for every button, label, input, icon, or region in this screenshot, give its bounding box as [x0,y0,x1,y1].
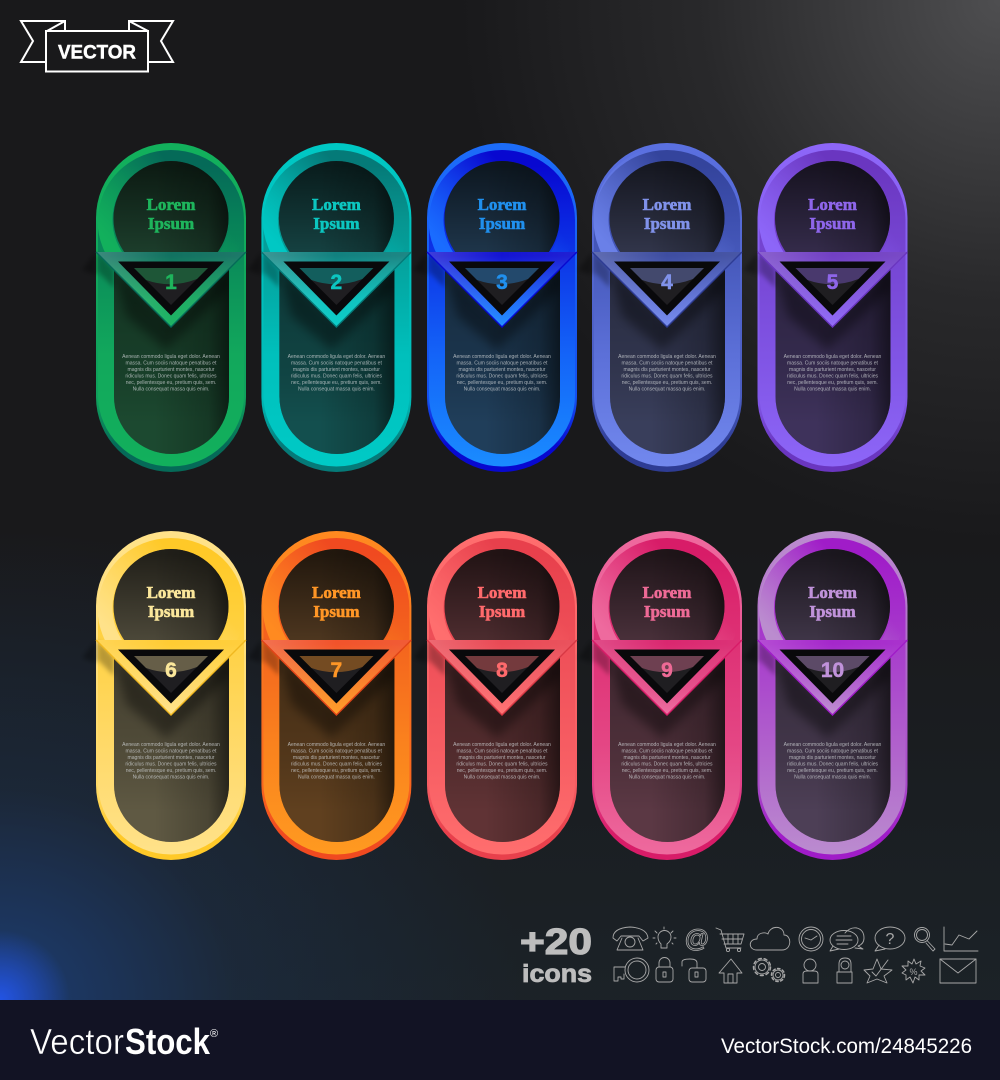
card 6: yellow: Ipsum [148,602,194,621]
card 4: periwinkle [578,143,742,472]
card 3: blue [413,143,577,472]
logo: VectorStock: Stock [125,1021,211,1062]
banner: vector ribbon [21,21,173,72]
card 4: periwinkle: ridiculus mus. Donec quam felis, ultricies [621,374,713,380]
card 4: periwinkle: 4 [661,271,673,294]
card 10: violet: 10 [821,659,844,682]
card 7: orange: magnis dis parturient montes, nascetur [293,755,380,761]
heading: +20 icons: icons [522,960,592,988]
icon: question bubble [875,927,905,951]
card 2: teal: nec, pellentesque eu, pretium quis, sem. [291,380,382,386]
card 8: coral [413,531,577,860]
card 2: teal: Aenean commodo ligula eget dolor. Aenean [288,354,385,360]
card 8: coral: nec, pellentesque eu, pretium quis, sem. [457,768,547,774]
icon set [613,925,978,983]
card 7: orange: Ipsum [313,602,360,621]
card 8: coral: massa. Cum sociis natoque penatibus et [457,748,548,754]
card 1: green: Aenean commodo ligula eget dolor. Aenean [122,354,220,360]
card 2: teal [247,143,411,472]
card 1: green: Nulla consequat massa quis enim. [133,386,209,392]
card 3: blue: ridiculus mus. Donec quam felis, ultricies [456,374,548,380]
card 9: pink: nec, pellentesque eu, pretium quis, sem. [622,768,712,774]
icon: magnifier [914,928,935,951]
card 9: pink: Ipsum [644,602,690,621]
icon: envelope [940,959,976,983]
card 2: teal: 2 [331,271,342,294]
card 2: teal: magnis dis parturient montes, nascetur [293,367,380,373]
card 1: green: Lorem [147,195,195,214]
footer id text: VectorStock.com/24845226 [721,1035,972,1058]
card 5: purple: Lorem [808,195,857,214]
card 9: pink: Lorem [643,583,691,602]
card 6: yellow: massa. Cum sociis natoque penatibus et [126,748,217,754]
card 2: teal: massa. Cum sociis natoque penatibus et [291,360,382,366]
card 2: teal: Lorem [312,195,361,214]
card 4: periwinkle: Aenean commodo ligula eget dolor. Aenean [618,354,716,360]
icon: lock [656,958,673,982]
card 7: orange [247,531,411,860]
icon: telephone [613,927,648,950]
card 4: periwinkle: Lorem [643,195,691,214]
card 6: yellow: ridiculus mus. Donec quam felis, ultricies [125,762,217,768]
card 1: green: nec, pellentesque eu, pretium quis, sem. [126,380,216,386]
icon: open lock [682,959,706,982]
card 8: coral: ridiculus mus. Donec quam felis, ultricies [456,762,548,768]
card 6: yellow: nec, pellentesque eu, pretium quis, sem. [126,768,216,774]
card 3: blue: 3 [496,271,508,294]
card 6: yellow: Lorem [147,583,195,602]
card 4: periwinkle: Nulla consequat massa quis enim. [629,386,705,392]
card 3: blue: Lorem [478,195,526,214]
icon: line chart [944,927,978,951]
card 7: orange: nec, pellentesque eu, pretium quis, sem. [291,768,382,774]
icon: key [614,958,649,982]
card 3: blue: massa. Cum sociis natoque penatibus et [457,360,548,366]
card 5: purple: 5 [827,271,839,294]
icon: at sign: @ [684,925,710,953]
card 9: pink: Nulla consequat massa quis enim. [629,774,705,780]
card 8: coral: Lorem [478,583,526,602]
card 9: pink [578,531,742,860]
icon: cloud [750,927,790,950]
heading: +20 icons: +20 [520,921,592,962]
card 8: coral: 8 [496,659,508,682]
card 10: violet: Lorem [808,583,857,602]
card 5: purple: Aenean commodo ligula eget dolor. Aenean [784,354,882,360]
card 4: periwinkle: Ipsum [644,214,690,233]
icon: light bulb [653,927,676,948]
card 8: coral: Nulla consequat massa quis enim. [464,774,540,780]
logo: VectorStock: ® [210,1028,218,1040]
icon: woman [837,958,852,983]
card 3: blue: Nulla consequat massa quis enim. [464,386,540,392]
icon: house [719,959,742,983]
icon: question mark: ? [886,931,895,948]
banner: vector ribbon: VECTOR [58,42,136,64]
card 6: yellow: 6 [165,659,177,682]
logo: VectorStock [30,1021,218,1062]
card 7: orange: Lorem [312,583,361,602]
card 6: yellow: Aenean commodo ligula eget dolor. Aenean [122,742,220,748]
card 10: violet: Nulla consequat massa quis enim. [794,774,871,780]
card 5: purple: ridiculus mus. Donec quam felis, ultricies [787,374,879,380]
card 9: pink: Aenean commodo ligula eget dolor. Aenean [618,742,716,748]
card 5: purple: magnis dis parturient montes, nascetur [789,367,876,373]
icon: chat bubbles [830,928,864,951]
card 1: green [82,143,246,472]
card 5: purple: nec, pellentesque eu, pretium quis, sem. [787,380,878,386]
card 7: orange: Aenean commodo ligula eget dolor. Aenean [288,742,385,748]
card 2: teal: ridiculus mus. Donec quam felis, ultricies [291,374,382,380]
card 5: purple [744,143,908,472]
icon: gears [754,958,784,982]
card 1: green: massa. Cum sociis natoque penatibus et [126,360,217,366]
card 8: coral: Ipsum [479,602,525,621]
card 8: coral: Aenean commodo ligula eget dolor. Aenean [453,742,551,748]
card 1: green: 1 [165,271,177,294]
card 6: yellow: magnis dis parturient montes, nascetur [128,755,215,761]
card 9: pink: ridiculus mus. Donec quam felis, ultricies [621,762,713,768]
card 7: orange: Nulla consequat massa quis enim. [298,774,375,780]
card 5: purple: massa. Cum sociis natoque penatibus et [787,360,879,366]
icon: discount burst: % [909,967,918,977]
card 10: violet: nec, pellentesque eu, pretium quis, sem. [787,768,878,774]
card 5: purple: Nulla consequat massa quis enim. [794,386,871,392]
card 10: violet [744,531,908,860]
card 9: pink: massa. Cum sociis natoque penatibus et [622,748,713,754]
card 6: yellow [82,531,246,860]
card 10: violet: ridiculus mus. Donec quam felis, ultricies [787,762,879,768]
card 1: green: Ipsum [148,214,194,233]
card 1: green: magnis dis parturient montes, nascetur [128,367,215,373]
card 3: blue: Aenean commodo ligula eget dolor. Aenean [453,354,551,360]
card 10: violet: Aenean commodo ligula eget dolor. Aenean [784,742,882,748]
icon: shopping cart [716,928,744,952]
card 3: blue: nec, pellentesque eu, pretium quis, sem. [457,380,547,386]
card 4: periwinkle: nec, pellentesque eu, pretium quis, sem. [622,380,712,386]
card 8: coral: magnis dis parturient montes, nascetur [459,755,546,761]
card 2: teal: Nulla consequat massa quis enim. [298,386,375,392]
icon: clock [799,927,823,951]
card 3: blue: Ipsum [479,214,525,233]
heading: +20 icons [520,921,592,988]
icon: man [803,959,818,983]
footer bar [0,1000,1000,1080]
card 10: violet: massa. Cum sociis natoque penatibus et [787,748,879,754]
card 6: yellow: Nulla consequat massa quis enim. [133,774,209,780]
card 7: orange: 7 [331,659,342,682]
icon: discount burst [902,959,925,983]
icon: star with check [864,959,892,983]
card 1: green: ridiculus mus. Donec quam felis, ultricies [125,374,217,380]
card 4: periwinkle: massa. Cum sociis natoque penatibus et [622,360,713,366]
card 10: violet: magnis dis parturient montes, nascetur [789,755,876,761]
card 10: violet: Ipsum [809,602,856,621]
card 7: orange: ridiculus mus. Donec quam felis, ultricies [291,762,382,768]
logo: VectorStock: Vector [30,1021,124,1062]
card 9: pink: 9 [661,659,673,682]
card 2: teal: Ipsum [313,214,360,233]
card 7: orange: massa. Cum sociis natoque penatibus et [291,748,382,754]
card 4: periwinkle: magnis dis parturient montes, nascetur [624,367,711,373]
card 5: purple: Ipsum [809,214,856,233]
card 3: blue: magnis dis parturient montes, nascetur [459,367,546,373]
card 9: pink: magnis dis parturient montes, nascetur [624,755,711,761]
